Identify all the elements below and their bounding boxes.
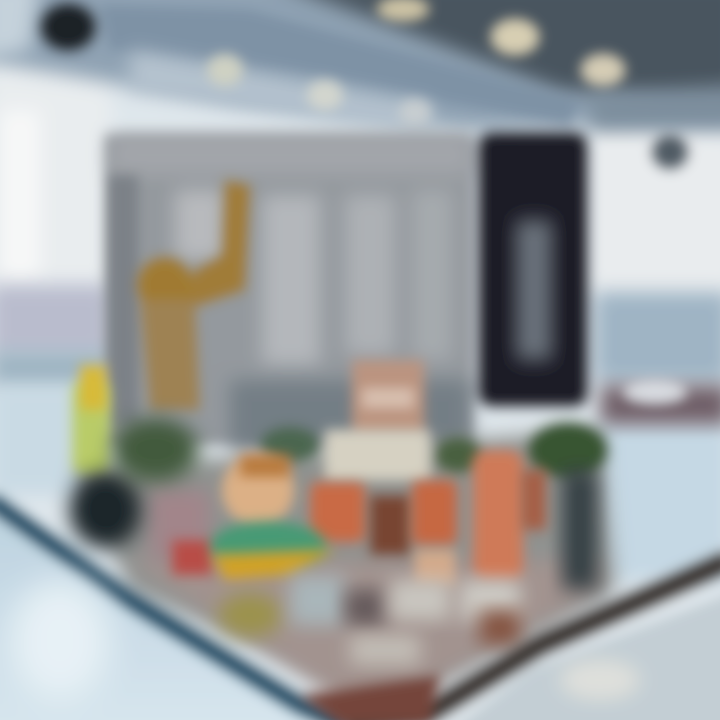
dark panel with text block <box>478 132 588 407</box>
plants and yellow figure <box>69 365 608 590</box>
central tower model <box>325 360 430 480</box>
orange model blocks <box>172 450 546 585</box>
ceiling camera and lights <box>40 3 96 51</box>
golden statue <box>137 180 250 410</box>
model base table <box>75 430 615 705</box>
colourful cartoon model <box>210 454 335 637</box>
grey wall panel <box>105 135 473 450</box>
ceiling structure <box>0 0 720 169</box>
floor and dark table edge <box>0 500 720 720</box>
lower model details <box>290 575 520 665</box>
